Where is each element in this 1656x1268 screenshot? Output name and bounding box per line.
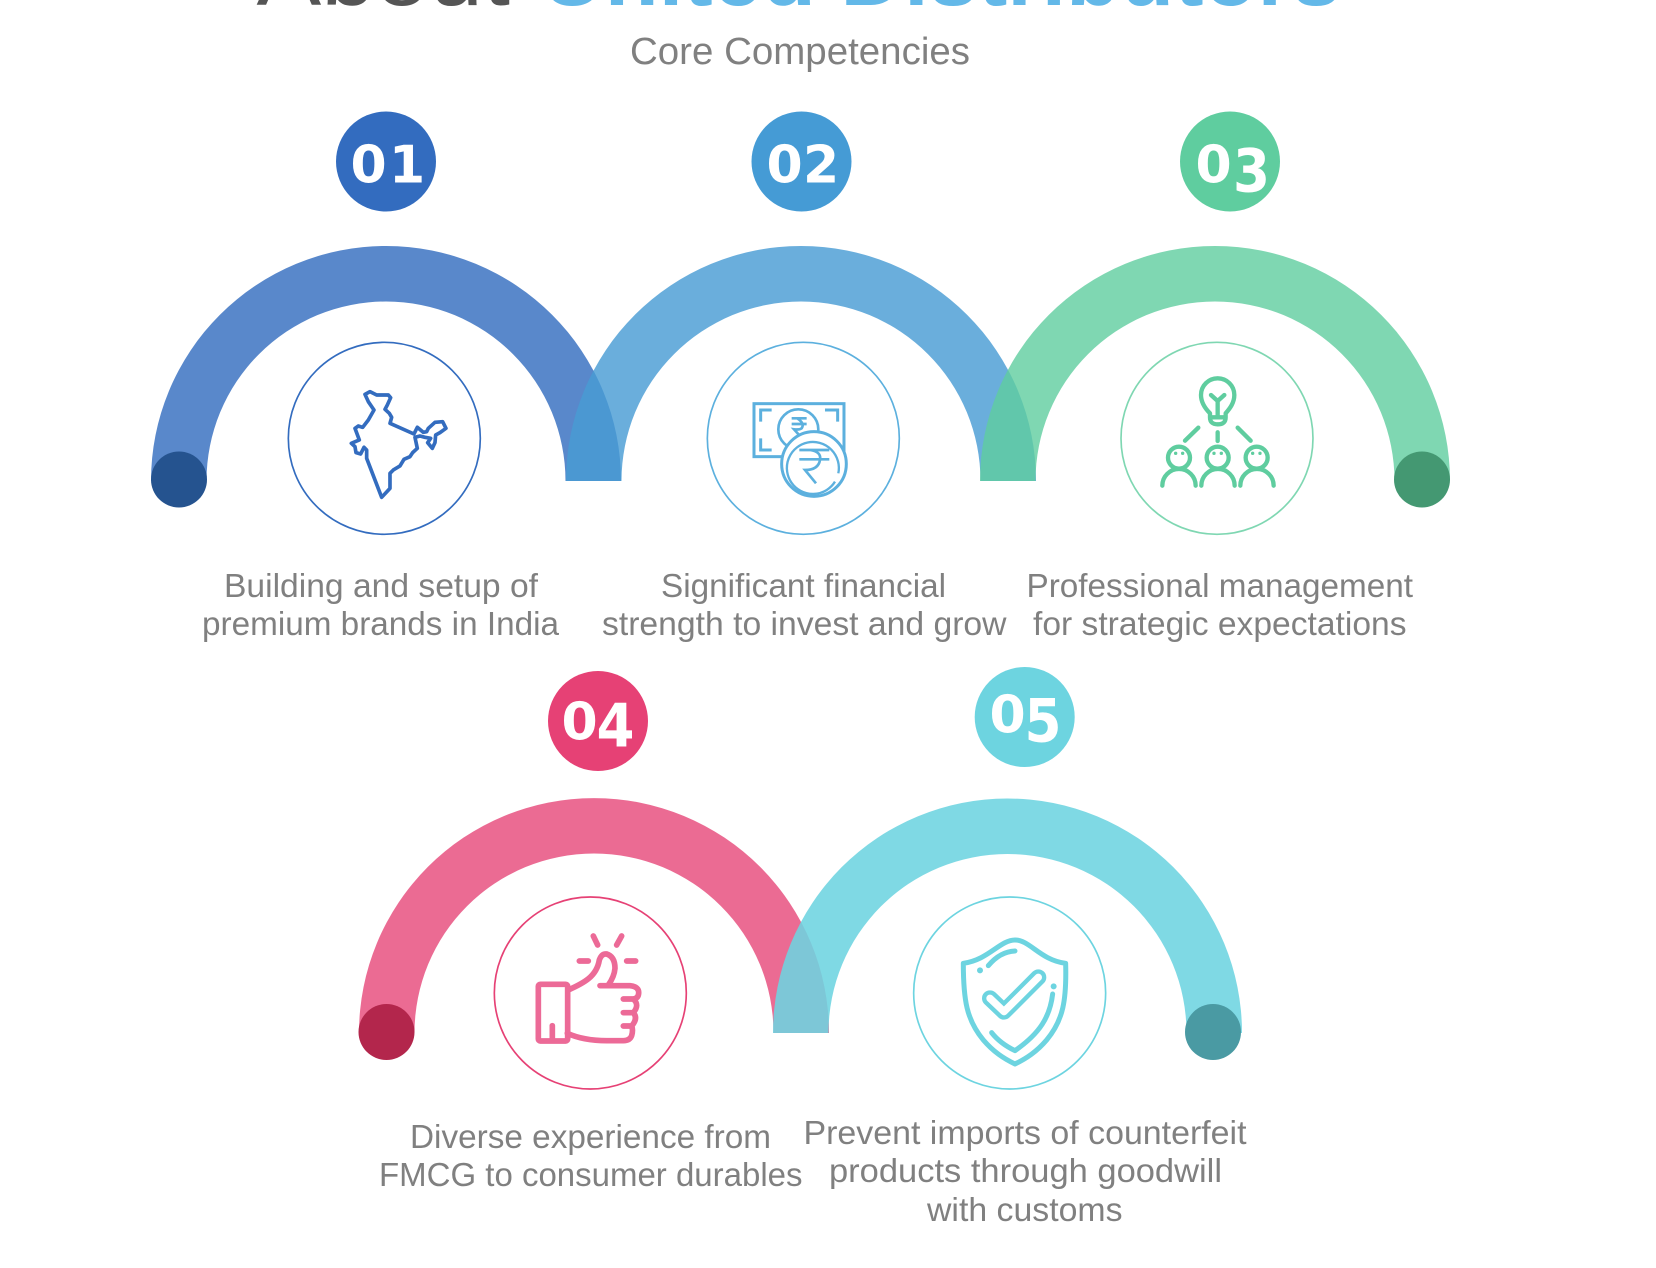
description 05: Prevent imports of counterfeit: [804, 1114, 1246, 1151]
number badge 04: 4: [596, 692, 634, 762]
number badge 05: 0: [990, 686, 1026, 746]
subtitle: Core Competencies: [630, 31, 970, 73]
number badge 01: 0: [350, 136, 387, 196]
number badge 05: [975, 667, 1075, 767]
number badge 03: 0: [1196, 136, 1232, 196]
description 04: FMCG to consumer durables: [379, 1156, 802, 1193]
number badge 01: 1: [389, 136, 425, 196]
arc 03: [980, 246, 1450, 481]
description 01: Building and setup of: [224, 567, 539, 604]
arc end cap 01: [151, 452, 207, 508]
number badge 01: [336, 112, 436, 212]
description 04: [379, 1118, 802, 1193]
description 03: for strategic expectations: [1033, 605, 1406, 642]
number badge 03: [1180, 112, 1280, 212]
description 05: [804, 1114, 1246, 1228]
number badge 05: 5: [1024, 686, 1062, 756]
arc 05: [773, 799, 1242, 1033]
description 01: premium brands in India: [202, 605, 560, 642]
icon: India map in circle: [288, 342, 480, 534]
description 05: products through goodwill: [829, 1152, 1222, 1189]
description 02: strength to invest and grow: [602, 605, 1007, 642]
description 03: [1026, 567, 1413, 642]
panel: competency 01: [151, 112, 621, 642]
number badge 02: 0: [766, 136, 803, 196]
description 02: Significant financial: [661, 567, 946, 604]
number badge 04: 0: [562, 692, 598, 752]
arc 01: [151, 246, 621, 481]
description 02: [602, 567, 1007, 642]
panel: competency 03: [980, 112, 1450, 642]
panel: competency 02: [566, 112, 1036, 642]
arc 02: [566, 246, 1036, 481]
arc end cap 04: [358, 1004, 414, 1060]
arc end cap 05: [1185, 1004, 1241, 1060]
description 04: Diverse experience from: [410, 1118, 771, 1155]
description 05: with customs: [926, 1191, 1122, 1228]
number badge 02: [752, 112, 852, 212]
panel: competency 04: [358, 671, 829, 1193]
icon: idea and team in circle: [1121, 342, 1313, 534]
icon: shield with check in circle: [914, 897, 1106, 1089]
description 01: [202, 567, 560, 642]
number badge 02: 2: [803, 136, 839, 196]
number badge 03: 3: [1233, 136, 1270, 206]
panel: competency 05: [773, 667, 1246, 1228]
description 03: Professional management: [1026, 567, 1413, 604]
arc end cap 03: [1394, 452, 1450, 508]
icon: thumbs up in circle: [494, 897, 686, 1089]
icon: rupee note and coin in circle: [707, 342, 899, 534]
number badge 04: [548, 671, 648, 771]
arc 04: [359, 798, 829, 1033]
